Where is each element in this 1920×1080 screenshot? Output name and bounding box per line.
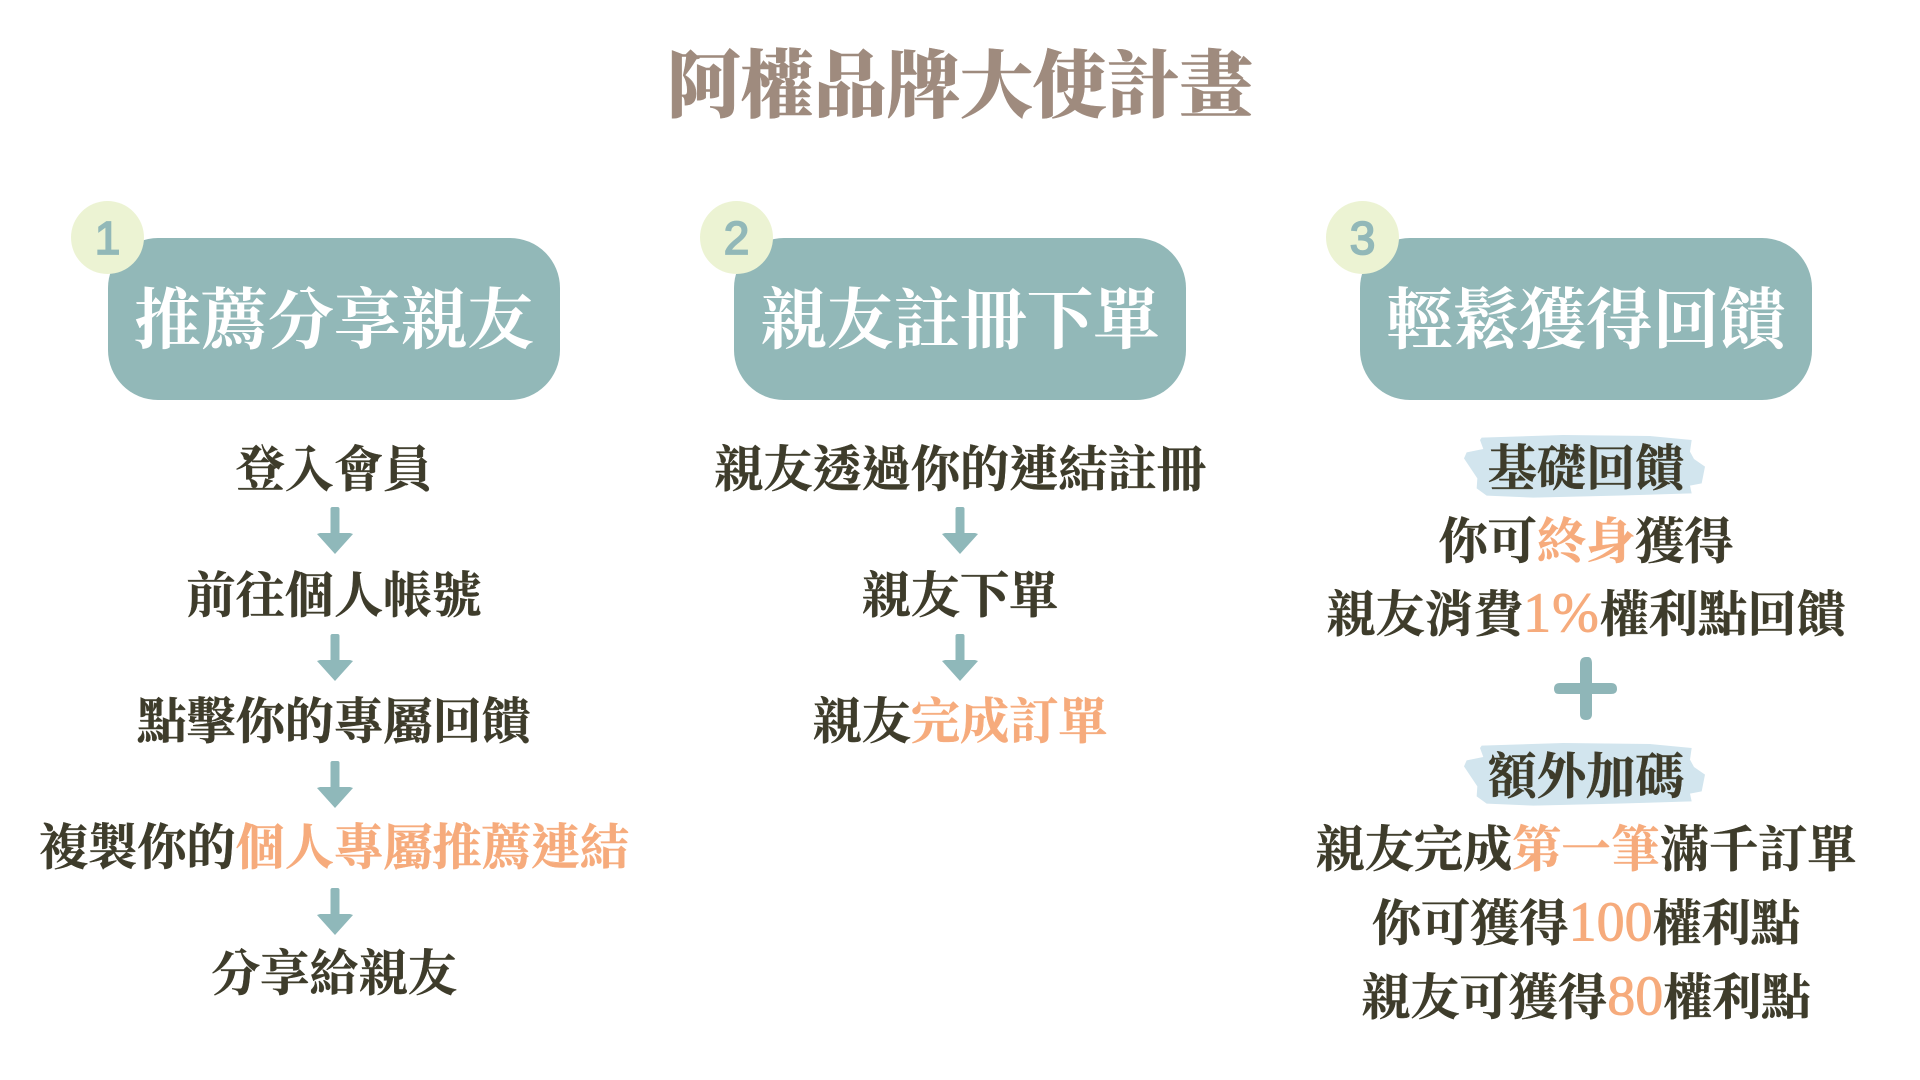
step 3 number badge: 3 — [1350, 212, 1375, 264]
step 2 number badge — [700, 201, 773, 274]
arrow — [317, 507, 353, 554]
panel: step 3 header — [1326, 201, 1812, 400]
arrow — [317, 888, 353, 935]
step 3 number badge — [1326, 201, 1399, 274]
arrow — [942, 507, 978, 554]
step 2 box — [734, 238, 1186, 400]
subheading: base reward: 基礎回饋 — [1488, 441, 1684, 496]
step 1 text: account: 前往個人帳號 — [186, 568, 482, 623]
panel: step 2 header — [700, 201, 1186, 400]
text: lifetime: 你可終身獲得 — [1438, 514, 1734, 569]
step 1 text: login: 登入會員 — [236, 442, 432, 497]
text: one percent: 親友消費1%權利點回饋 — [1326, 582, 1846, 644]
step 2 text: register: 親友透過你的連結註冊 — [714, 442, 1206, 497]
step 2 text: order: 親友下單 — [862, 568, 1058, 623]
subheading: bonus: 額外加碼 — [1488, 749, 1684, 804]
title: 阿權品牌大使計畫 — [667, 46, 1253, 127]
step 1 heading: 推薦分享親友 — [134, 285, 534, 358]
step 2 heading: 親友註冊下單 — [760, 285, 1160, 358]
brush highlight: bonus — [1464, 743, 1705, 806]
arrow — [317, 634, 353, 681]
arrow — [942, 634, 978, 681]
arrow — [317, 761, 353, 808]
step 1 number badge — [71, 201, 144, 274]
text: first order: 親友完成第一筆滿千訂單 — [1315, 822, 1857, 877]
step 1 text: rewards: 點擊你的專屬回饋 — [137, 694, 531, 749]
step 2 number badge: 2 — [724, 212, 749, 264]
step 1 text: copy link: 複製你的個人專屬推薦連結 — [39, 820, 629, 875]
step 1 number badge: 1 — [95, 212, 120, 264]
step 1 box — [108, 238, 560, 400]
panel: step 1 header — [71, 201, 560, 400]
step 2 text: complete: 親友完成訂單 — [812, 694, 1108, 749]
step 3 heading: 輕鬆獲得回饋 — [1386, 285, 1786, 358]
step 3 box — [1360, 238, 1812, 400]
text: 100 points: 你可獲得100權利點 — [1372, 891, 1800, 953]
icon: plus — [1554, 657, 1617, 720]
text: 80 points: 親友可獲得80權利點 — [1361, 965, 1811, 1027]
step 1 text: share: 分享給親友 — [211, 946, 457, 1001]
brush highlight: base reward — [1464, 435, 1705, 498]
